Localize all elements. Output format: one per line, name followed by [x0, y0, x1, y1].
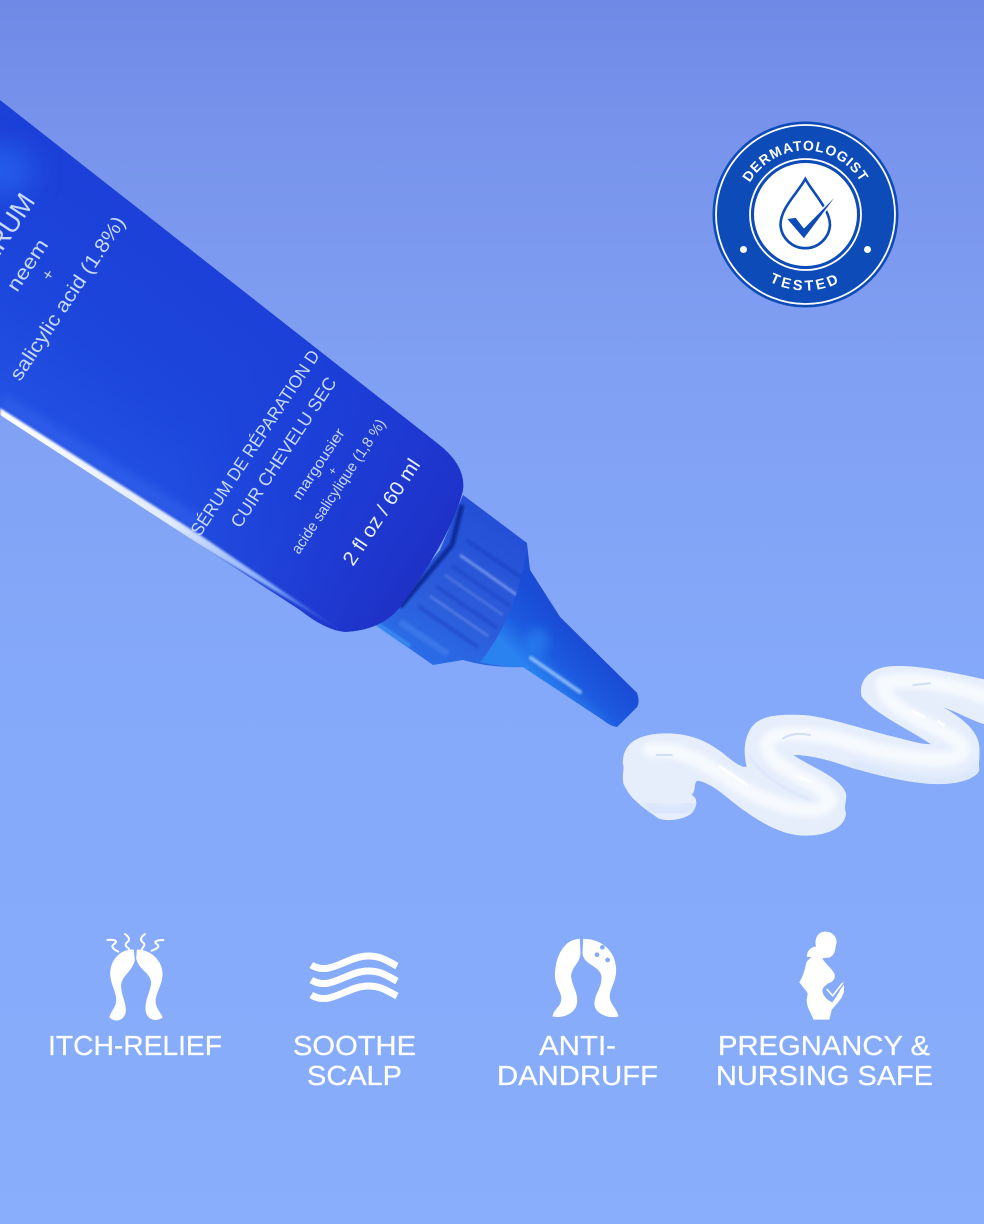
cream silhouette	[623, 666, 984, 836]
badge left dot	[740, 246, 747, 253]
label: soothe scalp: SCALP	[307, 1060, 402, 1091]
plus sign: +	[37, 265, 59, 284]
scalp left half	[553, 939, 580, 1016]
check mark on belly	[827, 982, 843, 996]
dandruff specks	[595, 945, 610, 962]
itch squiggles	[107, 934, 163, 952]
nozzle tip	[480, 550, 638, 727]
icon: itch relief scalp	[107, 934, 163, 1020]
scalp right half	[583, 939, 618, 1017]
label: itch relief: ITCH-RELIEF	[48, 1030, 222, 1061]
salicylic acid: salicylic acid (1.8%)	[6, 213, 130, 385]
margousier: margousier	[289, 425, 349, 503]
badge blue disc	[712, 122, 898, 308]
label: anti-dandruff: ANTI-	[539, 1030, 616, 1061]
badge inner ring	[750, 159, 861, 270]
label: pregnancy and nursing safe	[716, 1030, 933, 1091]
icon: soothing waves	[311, 956, 397, 999]
tube body	[0, 100, 463, 632]
badge right dot	[864, 246, 871, 253]
acide salicylique: acide salicylique (1,8 %)	[288, 416, 390, 557]
product nozzle cap	[373, 495, 638, 727]
badge top text: DERMATOLOGIST	[742, 140, 869, 182]
neem: neem	[3, 235, 53, 296]
tube end shading	[0, 100, 463, 632]
icon: pregnant silhouette with check	[799, 932, 844, 1020]
nozzle glow	[525, 628, 549, 656]
label: anti-dandruff	[497, 1030, 658, 1091]
label: soothe scalp	[293, 1030, 416, 1091]
badge white centre	[754, 163, 857, 266]
volume: 2 fl oz / 60 ml	[339, 455, 425, 570]
label: anti-dandruff: DANDRUFF	[497, 1060, 658, 1091]
tube label text	[0, 188, 425, 570]
scalp right half	[137, 950, 162, 1019]
badge outer ring	[716, 125, 895, 304]
collar shadow	[400, 505, 462, 607]
cream shading and highlights	[650, 681, 984, 811]
cream swirl	[623, 666, 984, 836]
label: soothe scalp: SOOTHE	[293, 1030, 416, 1061]
icon: anti-dandruff scalp	[553, 939, 618, 1017]
scalp left half	[110, 950, 134, 1020]
dermatologist tested badge	[712, 122, 898, 308]
benefit labels	[48, 1030, 933, 1091]
nozzle highlight	[531, 658, 580, 692]
French plus sign: +	[325, 464, 340, 478]
badge bottom text: TESTED	[772, 272, 837, 290]
cap ribs	[376, 540, 522, 654]
label: pregnancy and nursing safe: NURSING SAFE	[716, 1060, 933, 1091]
French product name line two: CUIR CHEVELU SEC	[227, 373, 340, 531]
tube soft highlight	[0, 145, 340, 630]
cap collar	[373, 495, 638, 727]
French product name line one: SÉRUM DE RÉPARATION D	[187, 346, 324, 539]
silhouette body	[799, 932, 844, 1020]
label: pregnancy and nursing safe: PREGNANCY &	[718, 1030, 930, 1061]
product tube	[0, 100, 463, 632]
icon: water drop with check	[780, 179, 842, 248]
